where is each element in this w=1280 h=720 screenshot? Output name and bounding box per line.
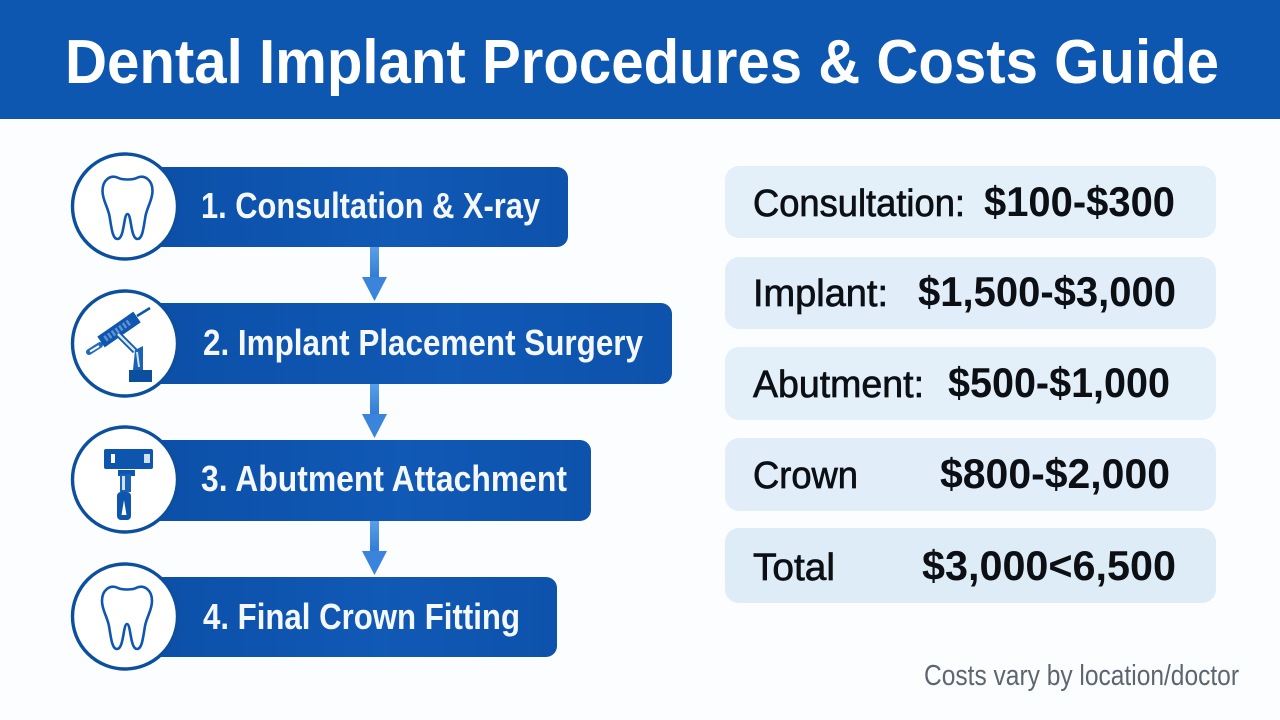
step 4 label: 4. Final Crown Fitting [203,596,520,637]
cost row: implant: Implant: [753,273,888,315]
cost row: consultation: Consultation: [753,183,965,225]
step 1: consultation [72,154,568,259]
cost row: total: Total [753,547,835,589]
step 3 label: 3. Abutment Attachment [201,458,567,499]
arrow: step 1 to 2 [362,247,387,301]
cost row: total [725,528,1216,603]
icon: tooth [72,154,178,259]
cost row: implant [725,257,1216,329]
cost row: crown: $800-$2,000 [940,450,1170,497]
cost row: consultation [725,166,1216,238]
cost row: abutment: Abutment: [753,364,924,406]
arrow: step 3 to 4 [362,521,387,575]
step 2 label: 2. Implant Placement Surgery [203,322,643,363]
title banner [0,0,1280,119]
icon: crown tooth [72,564,178,669]
step 1 label: 1. Consultation & X-ray [201,185,540,226]
cost row: implant: $1,500-$3,000 [918,268,1176,315]
arrow: step 2 to 3 [362,384,387,438]
title: Dental Implant Procedures & Costs Guide [65,28,1219,97]
step 2: implant placement [72,291,672,396]
step 4: final crown [72,564,557,669]
cost row: consultation: $100-$300 [984,178,1175,225]
cost row: crown [725,438,1216,511]
cost row: crown: Crown [753,455,858,497]
cost row: abutment [725,347,1216,420]
cost row: abutment: $500-$1,000 [948,359,1170,406]
icon: abutment [72,427,178,532]
cost row: total: $3,000<6,500 [922,542,1176,589]
icon: surgical drill [72,291,178,396]
step 3: abutment attachment [72,427,591,532]
